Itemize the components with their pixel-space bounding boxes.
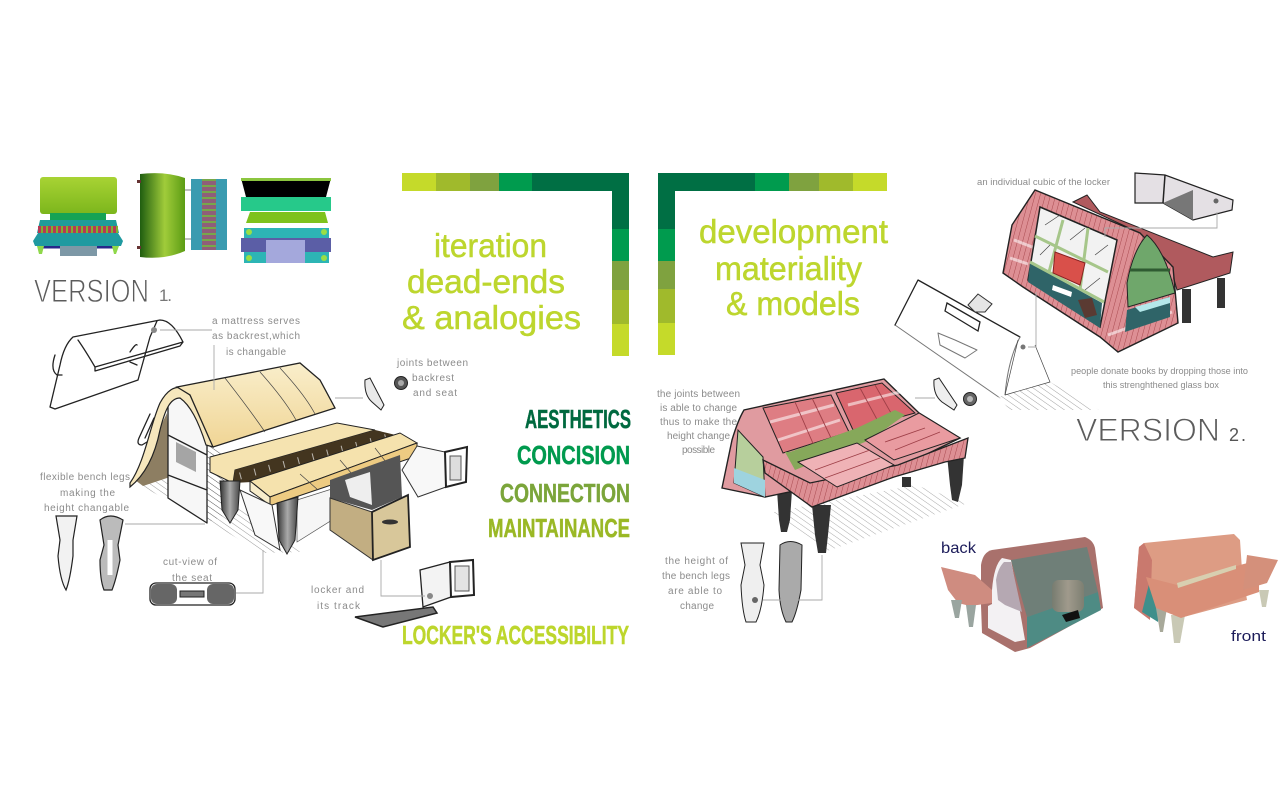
rear legs [1259, 590, 1269, 607]
cubic detail [1135, 173, 1233, 220]
seat with slats [210, 423, 417, 505]
end window [1125, 235, 1175, 332]
back face [1134, 534, 1247, 618]
annotations: version 2 locker: this strenghthened glass box [1103, 380, 1219, 391]
criteria list: CONCISION [517, 440, 630, 470]
sketch: version 1 bench [50, 320, 474, 627]
3D model: front view [1134, 534, 1278, 643]
annotations: version 1: joints between [396, 358, 468, 369]
annotations: version 2 sofa: the joints between [657, 389, 740, 400]
locker and track detail [355, 560, 474, 627]
seat cushions and arm [763, 413, 968, 507]
criteria list [402, 404, 631, 650]
handle [138, 414, 154, 445]
model: exploded view [241, 178, 331, 263]
bench legs [220, 481, 298, 554]
annotations: version 1: its track [317, 601, 361, 612]
criteria list: MAINTAINANCE [488, 513, 630, 543]
end shell [1003, 190, 1178, 352]
heading: development, materiality, models [699, 213, 888, 322]
heading: version 2: VERSION [1076, 412, 1220, 448]
floor shadow [137, 478, 300, 553]
annotations: version 2 sofa [657, 389, 740, 612]
side shell [1134, 543, 1152, 620]
annotations: version 1: a mattress serves [212, 316, 300, 327]
floor shadow [769, 485, 968, 552]
corner bar: right [658, 173, 887, 355]
sketch: version 2 locker [895, 173, 1233, 410]
backrest gap [1177, 565, 1236, 588]
annotations: version 2 sofa: change [680, 601, 714, 612]
lower glass panel [1027, 592, 1101, 648]
side glass [1142, 580, 1160, 622]
roll [1052, 580, 1084, 612]
3D model: back view [941, 537, 1103, 652]
annotations: version 1: flexible bench legs [40, 472, 130, 483]
connector lines [1028, 212, 1217, 347]
criteria list: CONNECTION [500, 478, 630, 508]
backrest detail sketch [50, 320, 183, 409]
rear legs [1182, 278, 1225, 323]
annotations: version 1: locker and [311, 585, 364, 596]
handle [1062, 610, 1080, 622]
heading: iteration, dead-ends, analogies [402, 227, 581, 336]
annotations: version 1: cut-view of [163, 557, 217, 568]
heading: version 1: VERSION [34, 273, 149, 309]
left legs [951, 600, 976, 627]
label: back: back [941, 540, 977, 557]
legs [777, 455, 964, 553]
annotations: version 2 sofa: thus to make the [660, 417, 737, 428]
annotations: version 2 sofa: is able to change [660, 403, 737, 414]
arm [1243, 555, 1278, 590]
annotations: version 2 sofa: the height of [665, 556, 728, 567]
annotations: version 2 locker: people donate books by dropping those into [1071, 366, 1248, 377]
end window [734, 430, 765, 497]
end opening [988, 558, 1025, 642]
heading: development, materiality, models: development [699, 213, 888, 250]
heading: iteration, dead-ends, analogies: iteration [434, 227, 547, 264]
connector lines [763, 398, 935, 600]
end glass [996, 562, 1022, 612]
heading: development, materiality, models: materiality [715, 250, 862, 287]
joint parts [934, 378, 976, 410]
criteria list: AESTHETICS [525, 404, 631, 434]
drawer [330, 495, 410, 560]
annotations: version 1: height changable [44, 503, 129, 514]
annotations: version 2 sofa: the bench legs [662, 571, 730, 582]
model: side and top view [137, 173, 227, 258]
locker stack [168, 400, 234, 523]
pull-out side locker [402, 446, 467, 497]
heading: version 1 number: 1 . [159, 286, 172, 305]
arm [941, 567, 992, 606]
3D models: version 1 [33, 173, 331, 263]
annotations: version 1: as backrest,which [212, 331, 300, 342]
mattress backrest [177, 363, 335, 447]
arched side wedge [135, 413, 170, 486]
heading: development, materiality, models: & models [726, 285, 860, 322]
seat [1146, 560, 1259, 618]
criteria list: LOCKER'S ACCESSIBILITY [402, 620, 629, 650]
corner bar: left [402, 173, 629, 356]
locker window [1028, 207, 1117, 328]
under-seat body [240, 455, 402, 550]
cut-view of the seat [150, 583, 235, 605]
annotations: version 1 [40, 316, 468, 612]
annotations: version 1: is changable [226, 347, 286, 358]
heading: version 2 number: 2 . [1229, 425, 1246, 445]
heading: iteration, dead-ends, analogies: dead-ends [407, 263, 565, 300]
annotations: version 2 locker [977, 177, 1248, 391]
rear panel [1011, 547, 1098, 617]
model: front view [33, 177, 123, 256]
connector lines [125, 330, 425, 596]
rear shell [1073, 195, 1233, 290]
heading: iteration, dead-ends, analogies: & analogies [402, 299, 581, 336]
sketch: version 2 sofa [722, 378, 976, 622]
shell [981, 537, 1103, 652]
annotations: version 1: and seat [413, 388, 457, 399]
front legs [1156, 608, 1185, 643]
glass box sketch [895, 280, 1099, 410]
label: front: front [1231, 628, 1267, 645]
joint parts [365, 376, 408, 410]
back shell [722, 379, 960, 497]
annotations: version 2 sofa: height change [667, 431, 730, 442]
shell highlight [1010, 240, 1172, 335]
annotations: version 2 sofa: possible [682, 445, 715, 456]
annotations: version 1: making the [60, 488, 115, 499]
back cushions [763, 383, 915, 470]
arch band [130, 388, 213, 487]
annotations: version 1: the seat [172, 573, 212, 584]
annotations: version 2 sofa: are able to [668, 586, 722, 597]
annotations: version 1: backrest [412, 373, 454, 384]
annotations: version 2 locker: an individual cubic of the locker [977, 177, 1110, 188]
bench leg details [56, 516, 123, 590]
leg details [741, 542, 802, 622]
